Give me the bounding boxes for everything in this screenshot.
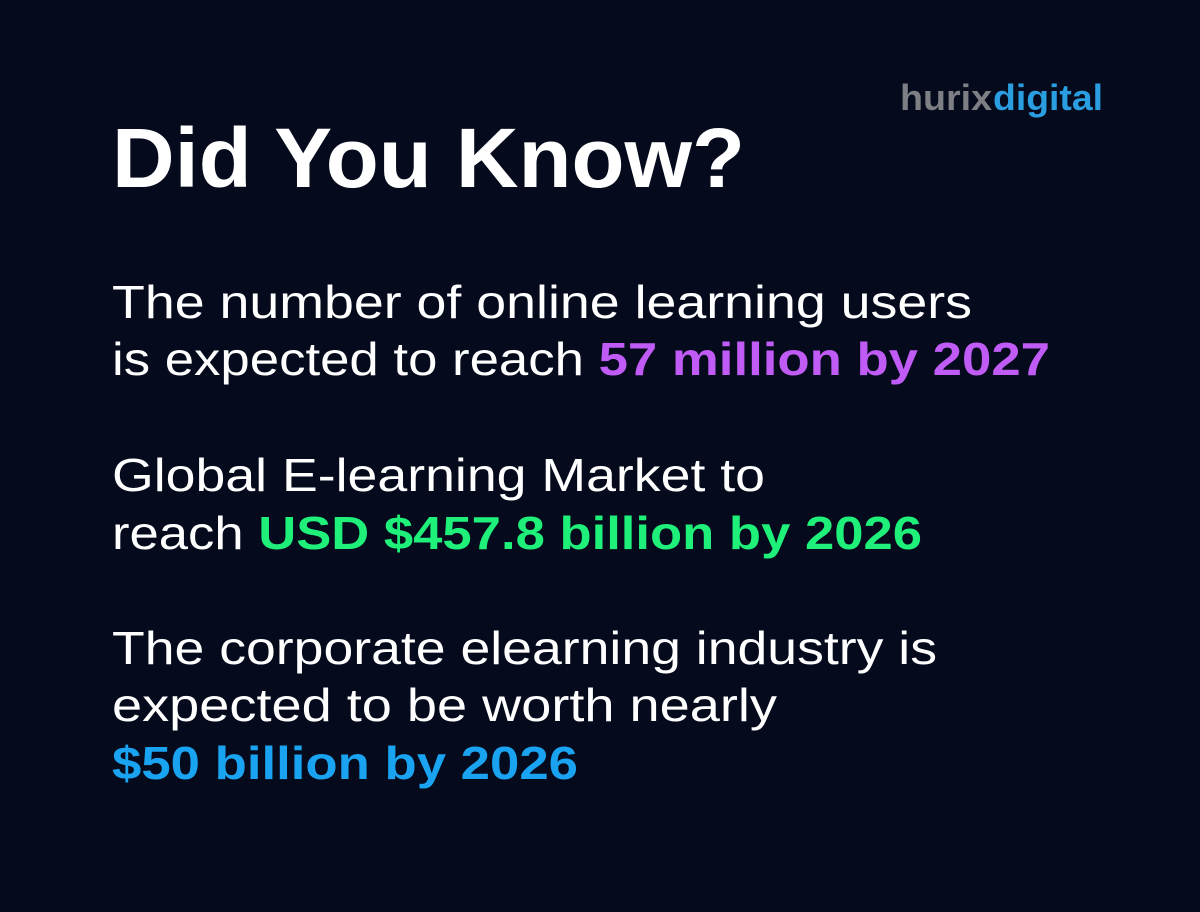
fact 1 (112, 276, 1050, 385)
fact 1: The number of online learning users (112, 276, 972, 328)
logo (900, 77, 1103, 118)
fact 3 (112, 622, 937, 789)
fact 2: reach USD $457.8 billion by 2026 (112, 507, 922, 559)
fact 1: is expected to reach 57 million by 2027 (112, 333, 1050, 385)
logo: digital (993, 77, 1103, 118)
title: Did You Know? (112, 111, 745, 205)
fact 3: $50 billion by 2026 (112, 737, 578, 789)
fact 2: Global E-learning Market to (112, 449, 765, 501)
fact 2 (112, 449, 922, 559)
fact 3: The corporate elearning industry is (112, 622, 937, 674)
logo: hurix (900, 77, 992, 118)
fact 3: expected to be worth nearly (112, 679, 777, 731)
